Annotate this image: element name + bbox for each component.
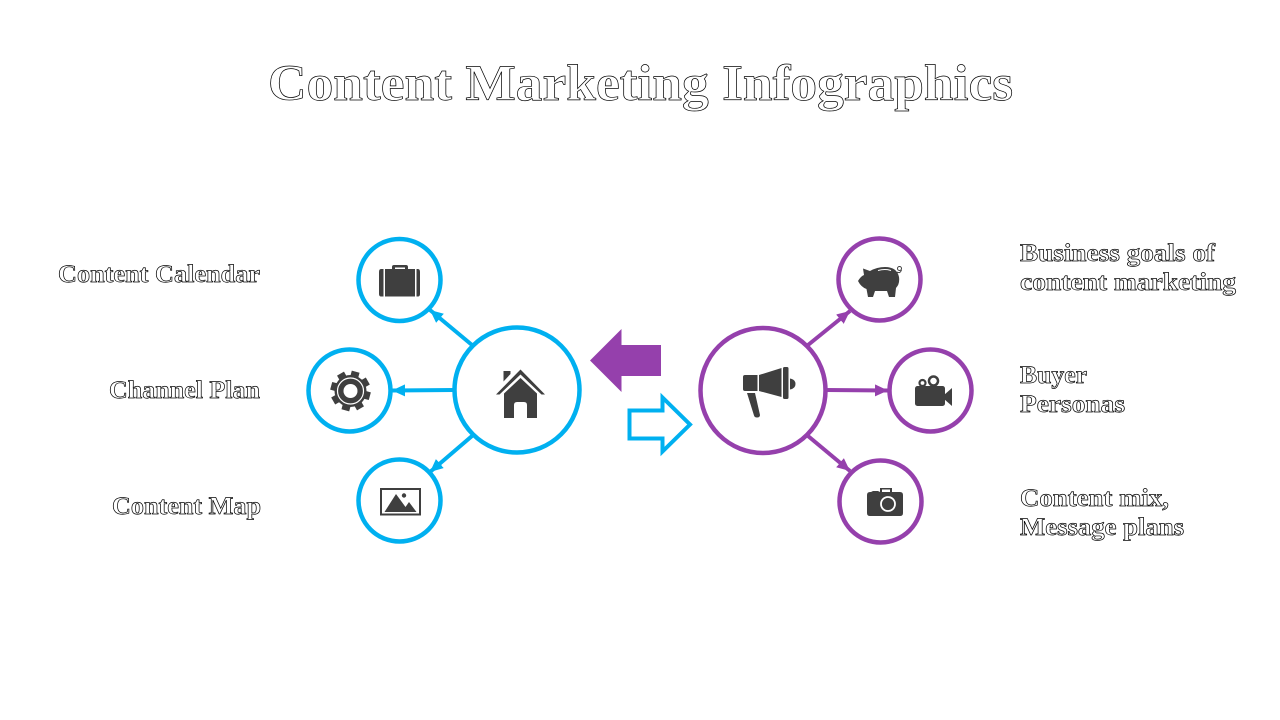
arrow: blue right outline xyxy=(630,398,690,452)
circle: personas xyxy=(890,350,972,432)
circle: channel xyxy=(308,350,390,432)
panel: left hub xyxy=(308,239,580,542)
arrow: hub to channel xyxy=(392,388,454,392)
label: content mix xyxy=(1020,485,1184,541)
icon: camera xyxy=(867,488,903,516)
icon: picture xyxy=(381,489,420,514)
label: content map: Content Map xyxy=(112,493,261,520)
label: content calendar: Content Calendar xyxy=(58,261,260,288)
circle: map xyxy=(358,460,440,542)
arrow: purple left block xyxy=(590,329,661,392)
circle: main megaphone xyxy=(700,328,826,453)
label: business goals xyxy=(1020,240,1237,296)
label: buyer personas: Buyer xyxy=(1020,362,1087,389)
arrow: hub to map xyxy=(430,436,472,472)
circle: main home xyxy=(454,328,580,452)
circle: goals xyxy=(838,238,920,320)
label: content mix: Content mix, xyxy=(1020,485,1169,512)
arrow: hub to calendar xyxy=(430,310,472,345)
icon: video camera xyxy=(915,376,952,406)
circle: calendar xyxy=(358,239,440,321)
icon: piggy bank xyxy=(858,266,902,297)
label: channel plan: Channel Plan xyxy=(109,377,260,404)
icon: house xyxy=(496,370,545,418)
icon: gear xyxy=(330,371,371,411)
label: business goals: content marketing xyxy=(1020,269,1237,296)
label: buyer personas xyxy=(1020,362,1125,418)
label: content mix: Message plans xyxy=(1020,514,1184,541)
title: Content Marketing Infographics xyxy=(268,56,1013,112)
panel: right hub xyxy=(700,238,972,542)
arrow: hub to goals xyxy=(808,311,850,345)
circle: content mix xyxy=(840,460,922,542)
arrow: hub to personas xyxy=(826,388,888,392)
label: buyer personas: Personas xyxy=(1020,391,1125,418)
icon: megaphone xyxy=(743,367,796,418)
label: business goals: Business goals of xyxy=(1020,240,1216,267)
arrow: hub to content mix xyxy=(808,436,850,471)
icon: briefcase xyxy=(379,265,420,296)
